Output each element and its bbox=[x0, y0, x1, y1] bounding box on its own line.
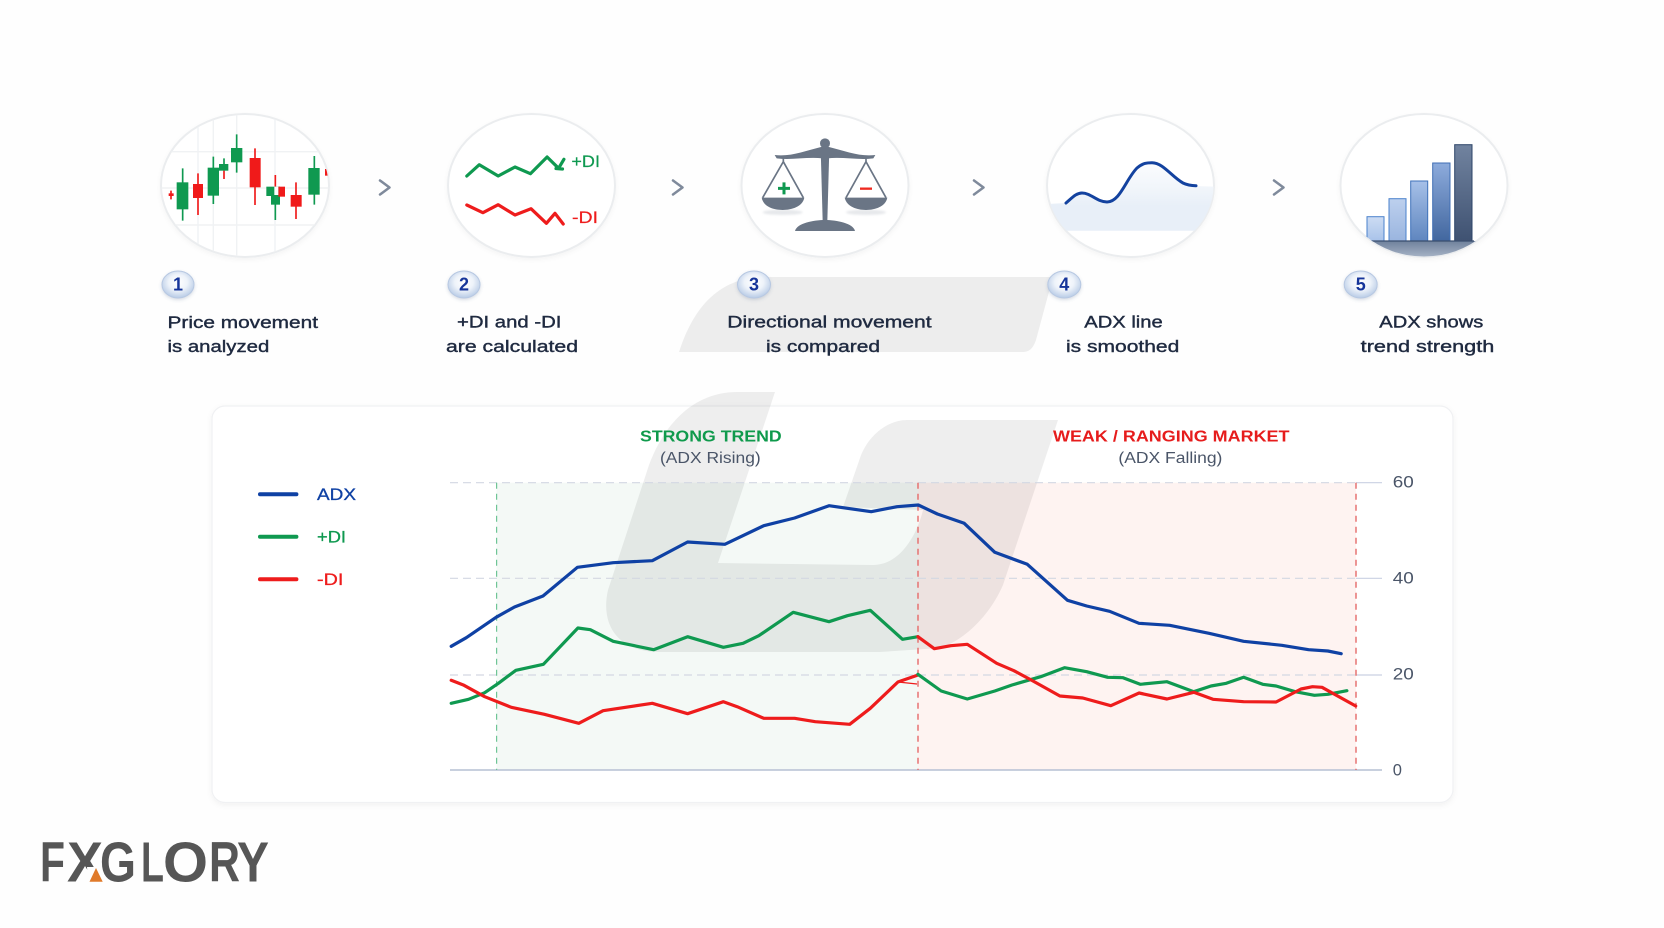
FXGLORY logo bbox=[40, 831, 269, 895]
FXGLORY logo: G bbox=[100, 831, 136, 895]
red -DI line bbox=[467, 205, 563, 224]
step 1 caption bbox=[168, 313, 318, 356]
logo orange accent bbox=[87, 867, 106, 884]
step 2 badge bbox=[448, 271, 480, 298]
step 3 badge bbox=[738, 271, 770, 298]
step 1 caption: Price movement bbox=[168, 313, 318, 332]
green +DI line bbox=[467, 157, 564, 176]
step 4 badge: 4 bbox=[1059, 274, 1069, 294]
watermark logo shape bbox=[606, 277, 1058, 652]
weak market heading bbox=[1053, 428, 1290, 467]
-DI label: -DI bbox=[572, 209, 598, 227]
arrow 2 bbox=[673, 180, 682, 194]
ADX line bbox=[451, 505, 1341, 654]
step 2 badge: 2 bbox=[459, 274, 469, 294]
weak market heading: WEAK / RANGING MARKET bbox=[1053, 428, 1290, 445]
step 2 caption: +DI and -DI bbox=[457, 312, 561, 332]
plus sign bbox=[778, 182, 790, 194]
step 3 icon: balance scale bbox=[742, 114, 908, 257]
strong trend heading: (ADX Rising) bbox=[660, 450, 761, 467]
step 1 badge bbox=[162, 271, 194, 298]
step 3 badge: 3 bbox=[749, 274, 759, 294]
step 1 icon: candlestick chart bbox=[160, 110, 330, 260]
minus sign bbox=[860, 185, 872, 192]
step 1 badge: 1 bbox=[173, 274, 183, 294]
step 4 caption: is smoothed bbox=[1066, 337, 1179, 356]
line chart bbox=[450, 474, 1414, 780]
strong trend heading: STRONG TREND bbox=[640, 428, 782, 445]
step 5 badge: 5 bbox=[1356, 274, 1366, 294]
weak market heading: (ADX Falling) bbox=[1118, 450, 1222, 467]
strong trend heading bbox=[640, 428, 782, 467]
FXGLORY logo: X bbox=[67, 831, 103, 895]
step 2 icon: DI lines bbox=[448, 114, 615, 257]
step 4 caption: ADX line bbox=[1084, 312, 1163, 332]
-DI line, strong zone bbox=[451, 675, 918, 724]
step 3 caption: is compared bbox=[766, 337, 880, 356]
step 5 badge bbox=[1344, 271, 1377, 298]
chart panel bbox=[212, 406, 1453, 802]
weak trend shaded zone bbox=[918, 483, 1356, 770]
legend: -DI: -DI bbox=[317, 571, 343, 589]
step 3 caption: Directional movement bbox=[727, 312, 932, 332]
grid lines bbox=[450, 483, 1382, 770]
y axis labels: 60 bbox=[1393, 474, 1414, 492]
step 5 icon: rising bars bbox=[1340, 114, 1510, 261]
+DI line, strong zone bbox=[451, 610, 918, 703]
y axis labels: 0 bbox=[1393, 762, 1402, 780]
step 4 caption bbox=[1066, 312, 1179, 356]
+DI line, weak zone bbox=[918, 668, 1347, 699]
step 4 icon: smoothed ADX line bbox=[1047, 114, 1214, 257]
FXGLORY logo: F bbox=[40, 831, 65, 895]
step 5 caption: trend strength bbox=[1361, 337, 1494, 356]
step 2 caption bbox=[446, 312, 578, 356]
step 3 caption bbox=[727, 312, 932, 356]
step 1 caption: is analyzed bbox=[168, 337, 269, 356]
arrow 3 bbox=[974, 180, 984, 194]
step 2 caption: are calculated bbox=[446, 337, 578, 356]
-DI line, weak zone bbox=[918, 637, 1356, 706]
legend bbox=[260, 486, 356, 589]
FXGLORY logo: Y bbox=[237, 831, 269, 895]
legend: +DI: +DI bbox=[317, 528, 346, 546]
arrow 4 bbox=[1274, 180, 1284, 194]
step 5 caption bbox=[1361, 312, 1494, 356]
+DI label: +DI bbox=[571, 153, 600, 171]
FXGLORY logo: L bbox=[141, 831, 164, 895]
FXGLORY logo: O bbox=[163, 831, 208, 895]
y axis labels: 40 bbox=[1393, 569, 1414, 587]
step 5 caption: ADX shows bbox=[1379, 312, 1483, 332]
y axis labels bbox=[1393, 474, 1414, 780]
legend: ADX: ADX bbox=[317, 486, 356, 504]
step 4 badge bbox=[1048, 271, 1081, 298]
y axis labels: 20 bbox=[1393, 665, 1414, 683]
strong trend shaded zone bbox=[497, 483, 918, 770]
arrow 1 bbox=[380, 180, 390, 194]
FXGLORY logo: R bbox=[209, 831, 240, 895]
